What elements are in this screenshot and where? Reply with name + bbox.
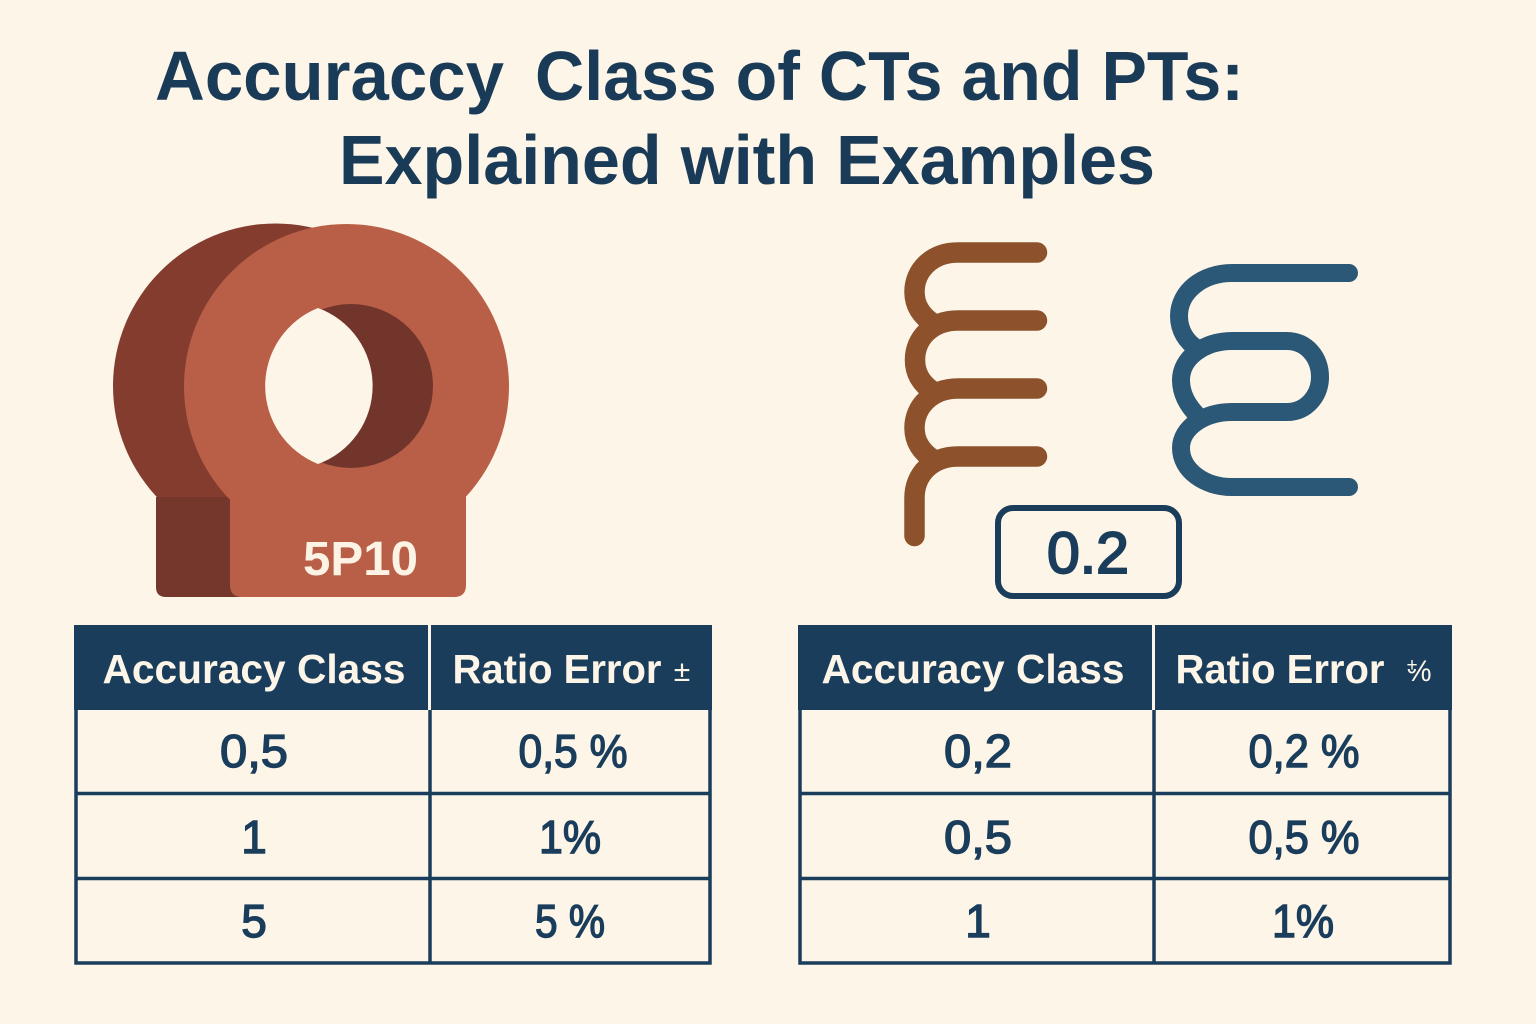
label: 5P10: 5P10 xyxy=(303,533,418,586)
table header: PT: + xyxy=(1406,655,1418,676)
table rows: PT: 1 xyxy=(965,895,991,947)
table rows: CT: 0,5 % xyxy=(518,725,628,777)
table rows: PT: 0,5 xyxy=(944,811,1012,863)
table rows: CT: 1 xyxy=(241,811,267,863)
table header: PT: Accuracy Class xyxy=(822,646,1124,692)
table header: CT: ± xyxy=(674,655,690,688)
table rows: PT: 0,5 % xyxy=(1248,811,1360,863)
table rows: CT: 0,5 xyxy=(220,725,288,777)
title: Explained with Examples xyxy=(339,121,1155,199)
table header: CT xyxy=(102,646,690,692)
icon: blue coil xyxy=(1179,273,1349,487)
table rows: CT: 5 % xyxy=(535,895,605,947)
table rows: CT: 1% xyxy=(539,811,601,863)
table rows: PT: 1% xyxy=(1272,895,1334,947)
table header: PT xyxy=(822,646,1432,692)
table rows: CT: 5 xyxy=(241,895,267,947)
table rows: CT xyxy=(220,725,628,947)
table header: PT: Ratio Error xyxy=(1176,646,1385,692)
table header: CT: Accuracy Class xyxy=(102,646,406,692)
table rows: PT xyxy=(944,725,1360,947)
table header: CT: Ratio Error xyxy=(452,646,662,692)
icon: brown coil xyxy=(914,252,1037,536)
label box: 0.2: 0.2 xyxy=(1047,521,1129,586)
table rows: PT: 0,2 % xyxy=(1248,725,1360,777)
table header: PT: % xyxy=(1406,655,1432,688)
label box: 0.2 xyxy=(998,508,1179,596)
title: Accuraccy xyxy=(155,37,504,115)
table: potential transformer accuracy xyxy=(798,625,1452,963)
title: Class of CTs and PTs: xyxy=(535,37,1244,115)
table: current transformer accuracy xyxy=(74,625,712,963)
icon: current transformer xyxy=(113,224,509,597)
title xyxy=(155,37,1244,199)
table rows: PT: 0,2 xyxy=(944,725,1012,777)
